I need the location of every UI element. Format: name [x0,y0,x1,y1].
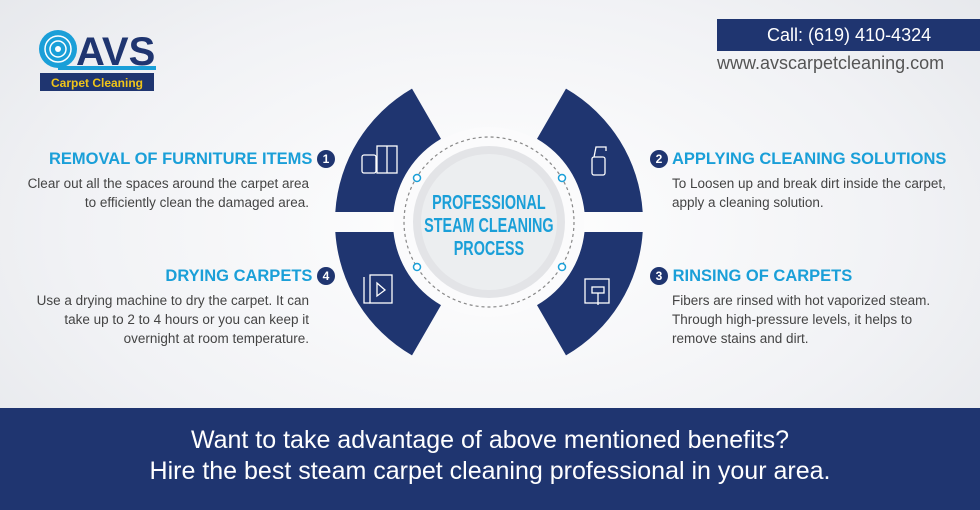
step 4: DRYING CARPETS [165,267,312,285]
step 3 [650,267,930,346]
step 4 [37,267,335,346]
step 1: to efficiently clean the damaged area. [85,195,309,210]
footer banner [0,408,980,510]
step 1 [28,150,335,210]
step 2: To Loosen up and break dirt inside the carpet, [672,176,946,191]
logo: Carpet Cleaning [51,76,143,90]
step 1: Clear out all the spaces around the carpet area [28,176,309,191]
step 4: take up to 2 to 4 hours or you can keep it [64,312,309,327]
footer banner: Want to take advantage of above mentioned benefits? [191,426,789,454]
logo [39,30,156,91]
footer banner: Hire the best steam carpet cleaning professional in your area. [150,457,830,485]
call box: Call: (619) 410-4324 [767,25,931,45]
step 1: 1 [323,152,329,166]
step 1: REMOVAL OF FURNITURE ITEMS [49,150,312,168]
step 3: 3 [656,269,662,283]
step 3: RINSING OF CARPETS [673,267,852,285]
step 2: APPLYING CLEANING SOLUTIONS [672,150,946,168]
call box [717,19,980,51]
step 4: 4 [323,269,329,283]
step 3: Through high-pressure levels, it helps to [672,312,912,327]
step 2 [650,150,946,210]
step 2: apply a cleaning solution. [672,195,824,210]
website: www.avscarpetcleaning.com [717,53,944,73]
step 2: 2 [656,152,662,166]
step 3: remove stains and dirt. [672,331,809,346]
process wheel: PROFESSIONAL [432,191,546,214]
step 4: Use a drying machine to dry the carpet. It can [37,293,309,308]
process wheel [335,88,643,356]
process wheel: STEAM CLEANING [424,214,554,237]
step 3: Fibers are rinsed with hot vaporized steam. [672,293,930,308]
step 4: overnight at room temperature. [124,331,309,346]
process wheel: PROCESS [454,237,524,260]
logo: AVS [76,30,155,74]
